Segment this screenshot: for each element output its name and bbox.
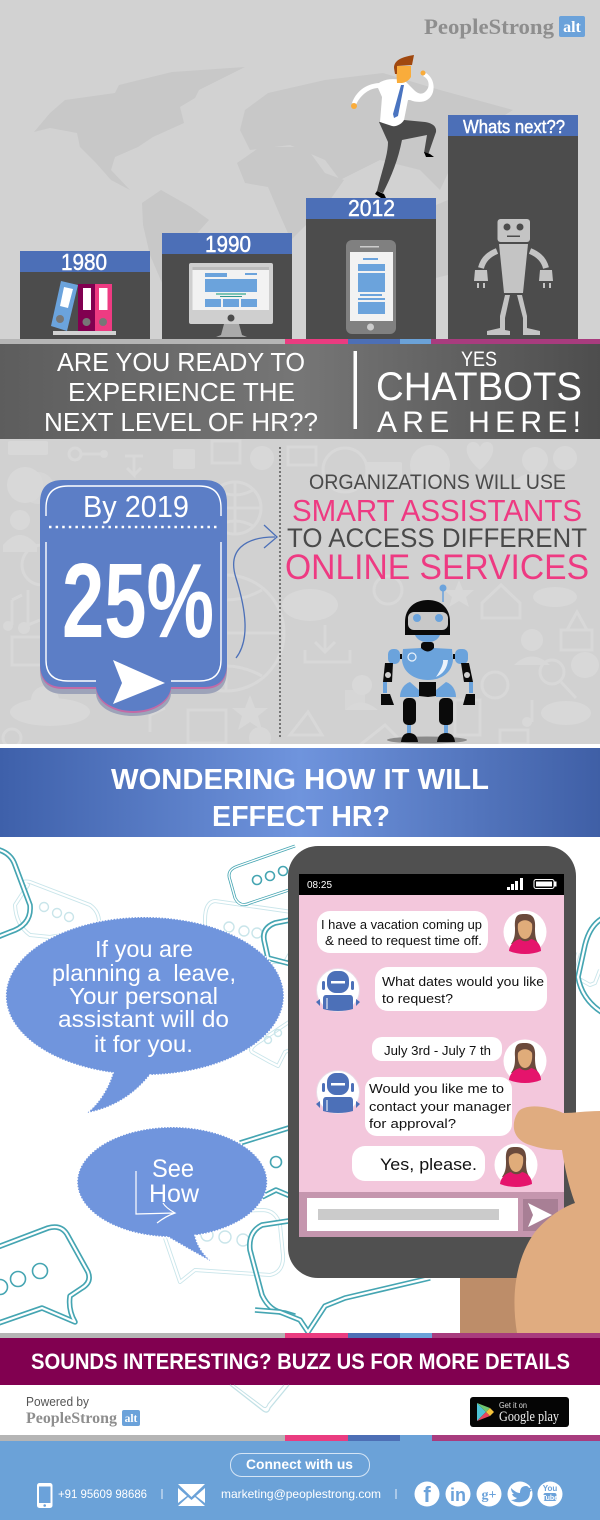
heading: chatbots are here: YES xyxy=(461,348,497,371)
text block: organizations will use xyxy=(285,471,589,587)
chat bubble 1 xyxy=(317,911,488,953)
text block: organizations will use: ONLINE SERVICES xyxy=(285,548,589,587)
powered by logo: alt xyxy=(125,1413,138,1425)
banner: wondering xyxy=(0,744,600,837)
chat bubble 4: Would you like me to xyxy=(369,1081,504,1096)
contact: phone number: +91 95609 98686 xyxy=(58,1487,147,1501)
avatar: bot xyxy=(316,968,360,1012)
social icons: f xyxy=(423,1482,431,1507)
banner: buzz us: SOUNDS INTERESTING? BUZZ US FOR MORE DETAILS xyxy=(31,1349,570,1374)
icon: smartphone xyxy=(346,240,396,334)
step: 2012 xyxy=(306,195,436,339)
arrow: curved pointer xyxy=(234,525,277,658)
status bar: 08:25 xyxy=(307,880,332,891)
step: 1990: 1990 xyxy=(205,231,251,257)
speech bubble: see how: See xyxy=(152,1155,194,1183)
avatar: woman xyxy=(504,910,546,954)
step: 1980: 1980 xyxy=(61,249,107,275)
background chat outlines xyxy=(0,846,600,1332)
icon: desktop monitor xyxy=(189,263,273,337)
speech bubble: planning a leave: Your personal xyxy=(69,983,218,1009)
heading: are you ready: EXPERIENCE THE xyxy=(68,377,295,407)
chat bubble 3 xyxy=(372,1037,502,1061)
social icons xyxy=(414,1482,562,1507)
icon: grey robot xyxy=(474,219,553,335)
step: whats next xyxy=(448,115,578,339)
step: 1990 xyxy=(162,231,292,339)
banner: buzz us xyxy=(0,1338,600,1385)
chat bubble 2: to request? xyxy=(382,991,453,1006)
badge: google play xyxy=(470,1397,569,1427)
heading: are you ready: ARE YOU READY TO xyxy=(57,347,305,377)
button: connect with us: Connect with us xyxy=(246,1456,353,1472)
heading: chatbots are here: ARE HERE! xyxy=(377,406,581,439)
illustration: blue robot xyxy=(381,584,475,744)
step: whats next: Whats next?? xyxy=(463,117,565,137)
speech bubble: see how: How xyxy=(149,1180,200,1208)
powered by logo xyxy=(26,1395,140,1427)
speech bubble: planning a leave xyxy=(6,917,284,1113)
panel: powered by xyxy=(0,1385,600,1435)
colour strip: top xyxy=(0,339,600,344)
heading: are you ready: NEXT LEVEL OF HR?? xyxy=(44,407,318,437)
chat bubble 1: & need to request time off. xyxy=(325,934,482,948)
illustration: climbing man xyxy=(351,55,436,198)
chat bubble 4 xyxy=(365,1077,512,1136)
banner: wondering: WONDERING HOW IT WILL xyxy=(111,764,489,796)
background icon pattern xyxy=(3,441,599,749)
status bar xyxy=(307,878,556,891)
callout: by 2019 25% card: 25% xyxy=(62,542,214,660)
speech bubble: planning a leave: assistant will do xyxy=(58,1006,229,1032)
hand: thumb and fingers xyxy=(514,1106,600,1333)
powered by logo: Powered by xyxy=(26,1395,90,1409)
colour strip: bottom xyxy=(0,1435,600,1441)
panel: smart assistants xyxy=(0,439,600,749)
icon: white arrow xyxy=(113,660,165,704)
social icons: in xyxy=(450,1485,466,1505)
chat bubble 2 xyxy=(375,967,547,1011)
avatar: woman xyxy=(494,1144,538,1187)
chat bubble 3: July 3rd - July 7 th xyxy=(384,1043,491,1058)
arrow: hand-drawn corner xyxy=(136,1171,175,1223)
text block: organizations will use: TO ACCESS DIFFERENT xyxy=(287,523,587,553)
speech bubble: see how xyxy=(77,1127,267,1262)
callout: by 2019 25% card: By 2019 xyxy=(83,489,189,524)
icon: phone xyxy=(37,1483,52,1508)
heading: chatbots are here: CHATBOTS xyxy=(376,365,582,409)
social icons: g+ xyxy=(482,1488,497,1503)
panel: chat demo xyxy=(0,837,600,1333)
chat bubble 5 xyxy=(352,1146,485,1181)
powered by logo: PeopleStrong xyxy=(26,1410,117,1427)
avatar: woman xyxy=(504,1040,546,1083)
panel: footer contact xyxy=(0,1441,600,1520)
banner: are you ready xyxy=(0,344,600,439)
panel: timeline staircase xyxy=(0,0,600,339)
step: 1980 xyxy=(20,249,150,339)
text block: organizations will use: SMART ASSISTANTS xyxy=(292,493,582,528)
banner: wondering: EFFECT HR? xyxy=(212,801,390,833)
chat bubble 2: What dates would you like xyxy=(382,974,544,989)
button: connect with us xyxy=(230,1454,370,1476)
badge: google play: Google play xyxy=(499,1409,559,1425)
speech bubble: planning a leave: If you are xyxy=(95,936,193,962)
colour strip: middle xyxy=(0,1333,600,1338)
text block: organizations will use: ORGANIZATIONS WILL USE xyxy=(309,471,566,494)
chat bubble 4: contact your manager xyxy=(369,1099,512,1114)
social icons: Tube xyxy=(542,1495,558,1502)
logo: PeopleStrong alt: PeopleStrong xyxy=(424,14,554,39)
badge: google play: Get it on xyxy=(499,1401,527,1410)
heading: are you ready xyxy=(44,347,318,437)
callout: by 2019 25% card xyxy=(40,480,227,716)
avatar: bot xyxy=(316,1070,360,1114)
step: 2012: 2012 xyxy=(348,195,395,221)
heading: chatbots are here xyxy=(376,348,582,439)
chat bubble 4: for approval? xyxy=(369,1116,456,1131)
hand: palm behind phone xyxy=(460,1270,520,1333)
social icons: You xyxy=(543,1484,557,1493)
logo: PeopleStrong alt: alt xyxy=(563,19,582,36)
world map xyxy=(34,67,513,290)
chat bubble 1: I have a vacation coming up xyxy=(321,918,482,932)
chat bubble 5: Yes, please. xyxy=(380,1155,477,1174)
icon: envelope xyxy=(178,1484,205,1506)
icon: binders xyxy=(51,281,116,335)
speech bubble: planning a leave: planning a leave, xyxy=(52,960,236,986)
phone mockup xyxy=(288,846,576,1278)
speech bubble: planning a leave: it for you. xyxy=(94,1031,193,1057)
contact: email: marketing@peoplestrong.com xyxy=(221,1487,381,1501)
